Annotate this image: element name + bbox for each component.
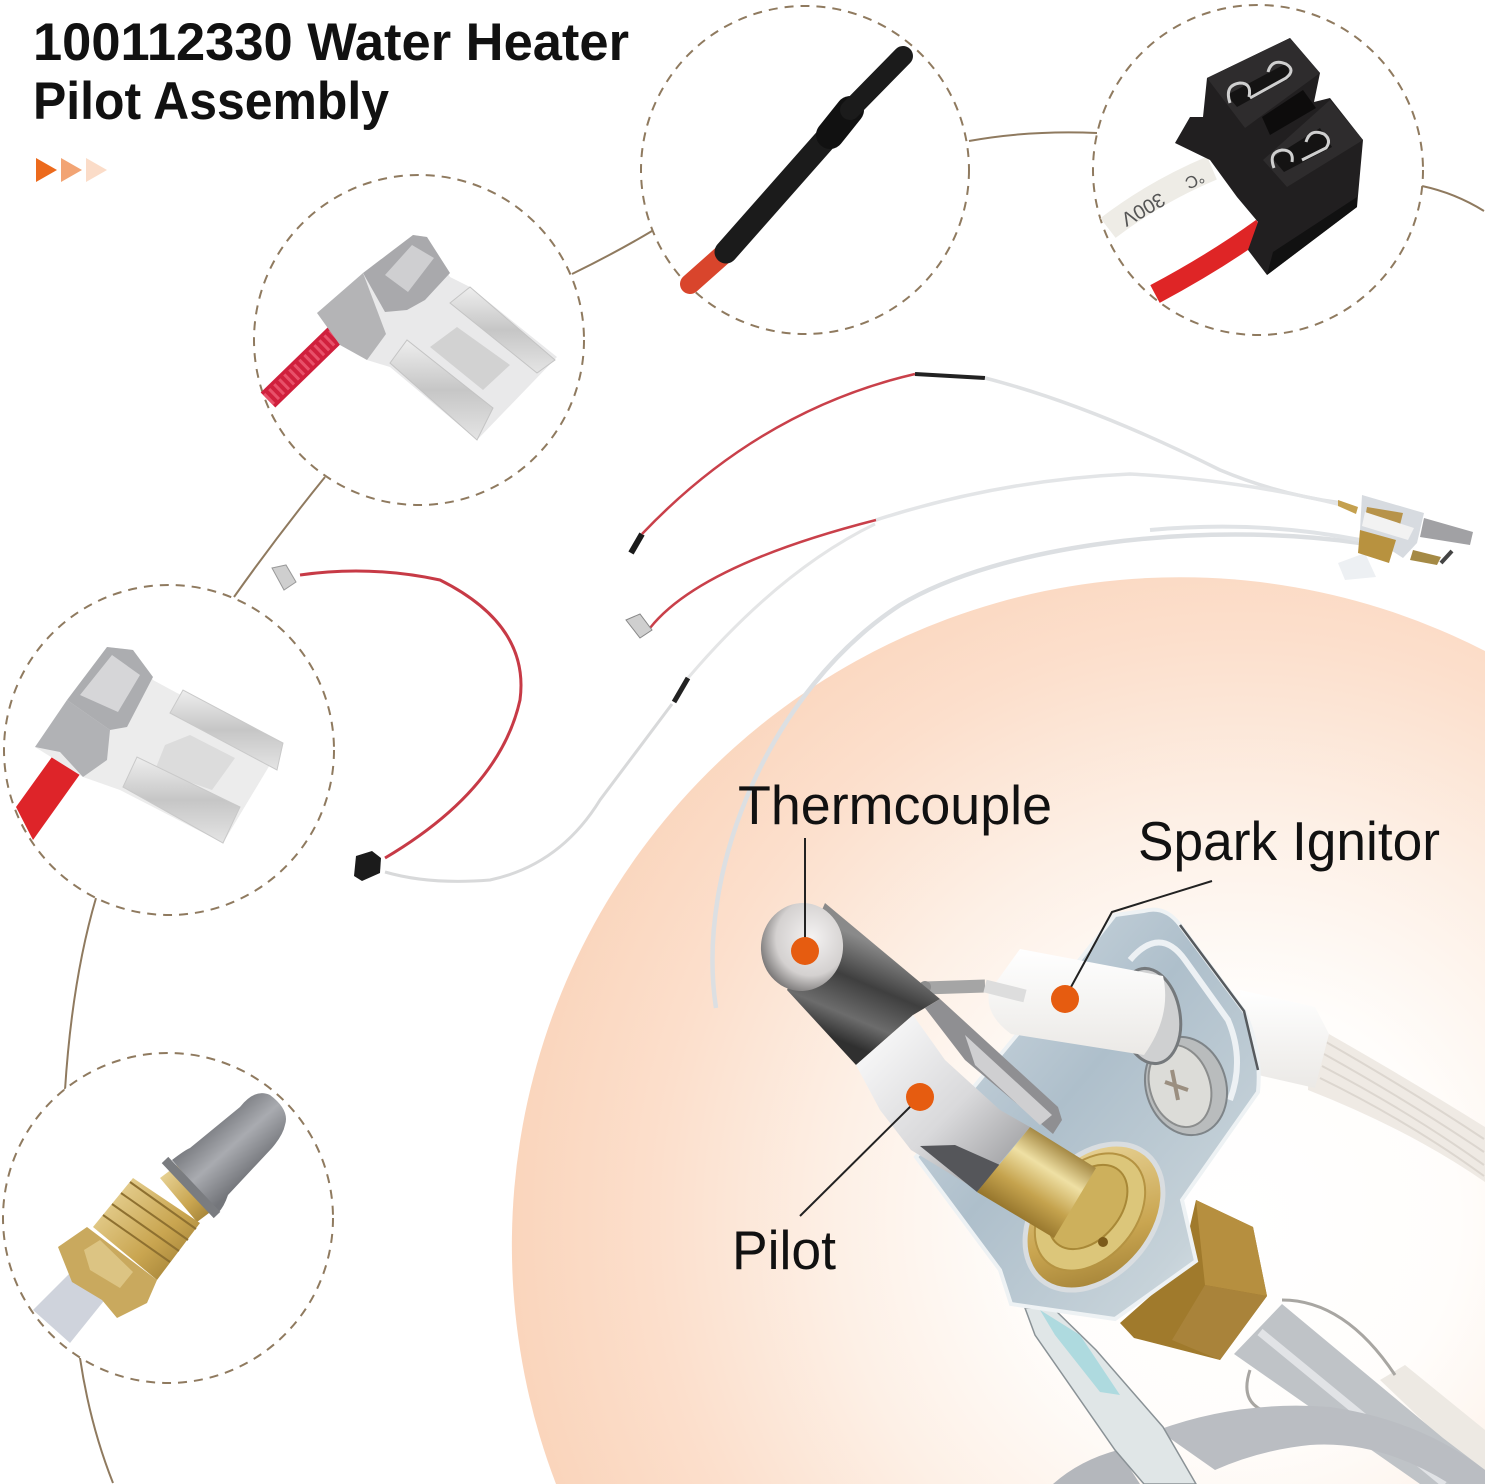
brass hex nut xyxy=(1120,1200,1267,1360)
fabric sleeve xyxy=(1380,1365,1485,1484)
bracket plate xyxy=(916,910,1259,1319)
title: Pilot Assembly xyxy=(33,72,389,131)
detail circle: black plug connector: 300V xyxy=(1116,188,1168,230)
detail circle: black plug connector xyxy=(1093,5,1423,335)
label: Spark Ignitor: Spark Ignitor xyxy=(1138,810,1440,872)
dark thermocouple tube xyxy=(787,903,940,1065)
ignitor washer xyxy=(1112,964,1188,1068)
label: Pilot: Pilot xyxy=(732,1219,836,1281)
glass rings xyxy=(1247,1300,1395,1410)
detail circle: red insulated wire terminal xyxy=(4,585,334,915)
title xyxy=(33,13,629,131)
braided cable xyxy=(1308,1030,1485,1182)
title: 100112330 Water Heater xyxy=(33,13,629,72)
guide strip xyxy=(925,999,1062,1134)
small pilot head xyxy=(1338,495,1473,580)
small terminal: left loose wire xyxy=(272,565,296,590)
small terminal: centre wire xyxy=(626,614,652,638)
screw and washer xyxy=(1133,1026,1239,1146)
detail circle: brass fitting xyxy=(3,1053,333,1383)
detail circle: black plug connector: °C xyxy=(1182,167,1207,193)
wire diagram: long wires xyxy=(300,374,1360,1008)
lower strap xyxy=(1025,1308,1196,1484)
curved silver tube xyxy=(1158,1406,1485,1484)
peach background circle xyxy=(512,577,1485,1484)
spark electrode rod xyxy=(919,981,1025,996)
label: Thermcouple: Thermcouple xyxy=(738,774,1052,836)
small black connector xyxy=(354,851,381,881)
label: Thermcouple xyxy=(738,774,1052,965)
rear ceramic xyxy=(1240,990,1329,1088)
label: Pilot xyxy=(732,1083,934,1281)
silver hood xyxy=(856,1015,1030,1190)
detail circle: red braided wire terminal xyxy=(254,175,584,505)
brass flange xyxy=(997,1117,1191,1317)
thermocouple end cap xyxy=(755,898,849,996)
detail circle: heat shrink wire end xyxy=(641,6,969,334)
silver tube xyxy=(1234,1304,1485,1484)
pilot assembly close-up photo xyxy=(755,898,1485,1484)
label: Spark Ignitor xyxy=(1051,810,1440,1013)
icon: triple arrows xyxy=(36,158,107,182)
brass pilot tube xyxy=(977,1127,1096,1238)
ceramic spark ignitor xyxy=(988,949,1165,1055)
